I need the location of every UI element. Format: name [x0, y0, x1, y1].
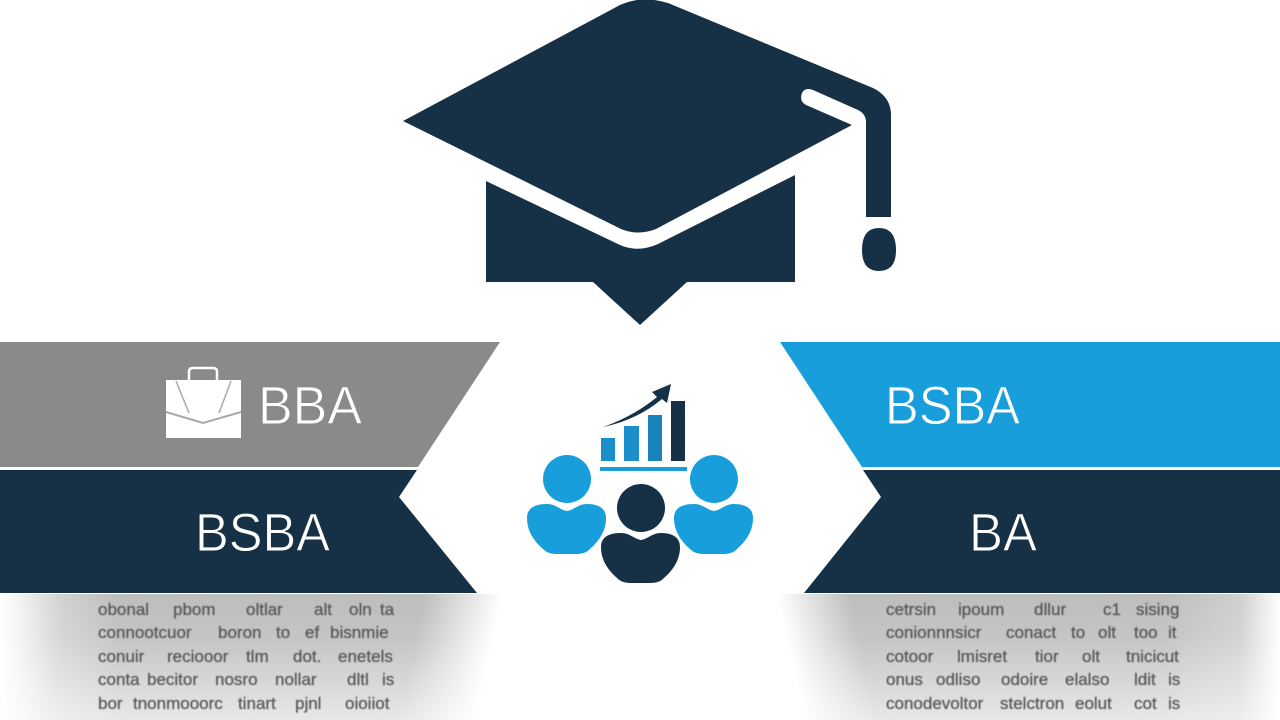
text block: left: dot. [293, 647, 321, 666]
text block: right: tior [1035, 647, 1059, 666]
icon: people with growth chart [527, 384, 753, 583]
text block: right: olt [1098, 623, 1116, 642]
text block: right: is [1168, 694, 1180, 713]
icon: briefcase [166, 368, 241, 438]
text block: left: obonal [98, 600, 149, 619]
tassel [862, 228, 896, 271]
panel: left text shadow [0, 594, 500, 720]
text block: right: ldit [1134, 670, 1156, 689]
text block: right: conact [1006, 623, 1056, 642]
cap base [486, 175, 795, 325]
panel: BSBA band (blue) [780, 342, 1280, 467]
text block: left: to [276, 623, 290, 642]
text block: left: tinart [238, 694, 276, 713]
text block: right [886, 600, 1180, 713]
panel: BBA band [0, 342, 500, 467]
cap board and tassel cord [403, 0, 891, 233]
text block: right: to [1071, 623, 1085, 642]
text block: right: conionnnsicr [886, 623, 982, 642]
panel: BA band [804, 470, 1280, 593]
text block: left: conuir [98, 647, 145, 666]
text block: left: nollar [275, 670, 317, 689]
text block: right: odoire [1001, 670, 1048, 689]
label: BA: BA [969, 503, 1037, 563]
text block: right: conodevoltor [886, 694, 984, 713]
text block: left: bor [98, 694, 123, 713]
text block: left: reciooor [167, 647, 229, 666]
text block: left: connootcuor [98, 623, 192, 642]
text block: left: ef [305, 623, 319, 642]
text block: left: alt [314, 600, 332, 619]
text block: left: conta [98, 670, 140, 689]
text block: right: elalso [1065, 670, 1109, 689]
label: BSBA: BSBA [885, 376, 1020, 436]
text block: right: cotoor [886, 647, 934, 666]
person left [527, 455, 606, 554]
text block: right: stelctron [1000, 694, 1064, 713]
text block: right: c1 [1103, 600, 1121, 619]
text block: left: oltlar [246, 600, 283, 619]
text block: left: is [382, 670, 394, 689]
text block: left: bisnmie [330, 623, 389, 642]
text block: right: tnicicut [1126, 647, 1179, 666]
text block: left: oioiiot [345, 694, 390, 713]
text block: right: dllur [1034, 600, 1066, 619]
text block: left: pjnl [295, 694, 321, 713]
text block: right: onus [886, 670, 923, 689]
label: BBA: BBA [258, 376, 362, 436]
text block: right: olt [1082, 647, 1100, 666]
text block: right: ipoum [958, 600, 1004, 619]
label: BSBA: BSBA [195, 503, 330, 563]
text block: right: it [1168, 623, 1177, 642]
text block: left: tlm [246, 647, 269, 666]
text block: right: lmisret [957, 647, 1007, 666]
text block: left: pbom [173, 600, 216, 619]
text block: left: oln [349, 600, 372, 619]
text block: left: tnonmooorc [133, 694, 223, 713]
arrow [603, 384, 671, 427]
text block: left: becitor [147, 670, 198, 689]
text block: right: is [1168, 670, 1180, 689]
text block: right: eolut [1075, 694, 1112, 713]
text block: right: too [1134, 623, 1158, 642]
text block: right: cetrsin [886, 600, 936, 619]
icon: graduation cap [403, 0, 896, 325]
text block: left: nosro [215, 670, 258, 689]
person right [674, 455, 753, 554]
text block: left [98, 600, 395, 713]
text block: right: sising [1136, 600, 1179, 619]
text block: left: ta [380, 600, 395, 619]
text block: right: cot [1134, 694, 1157, 713]
bar chart [600, 401, 687, 471]
person centre [601, 484, 680, 583]
panel: right text shadow [780, 594, 1280, 720]
text block: left: boron [218, 623, 261, 642]
panel: BSBA band (navy) [0, 470, 477, 593]
text block: left: enetels [338, 647, 393, 666]
text block: left: dltl [347, 670, 369, 689]
text block: right: odliso [936, 670, 980, 689]
